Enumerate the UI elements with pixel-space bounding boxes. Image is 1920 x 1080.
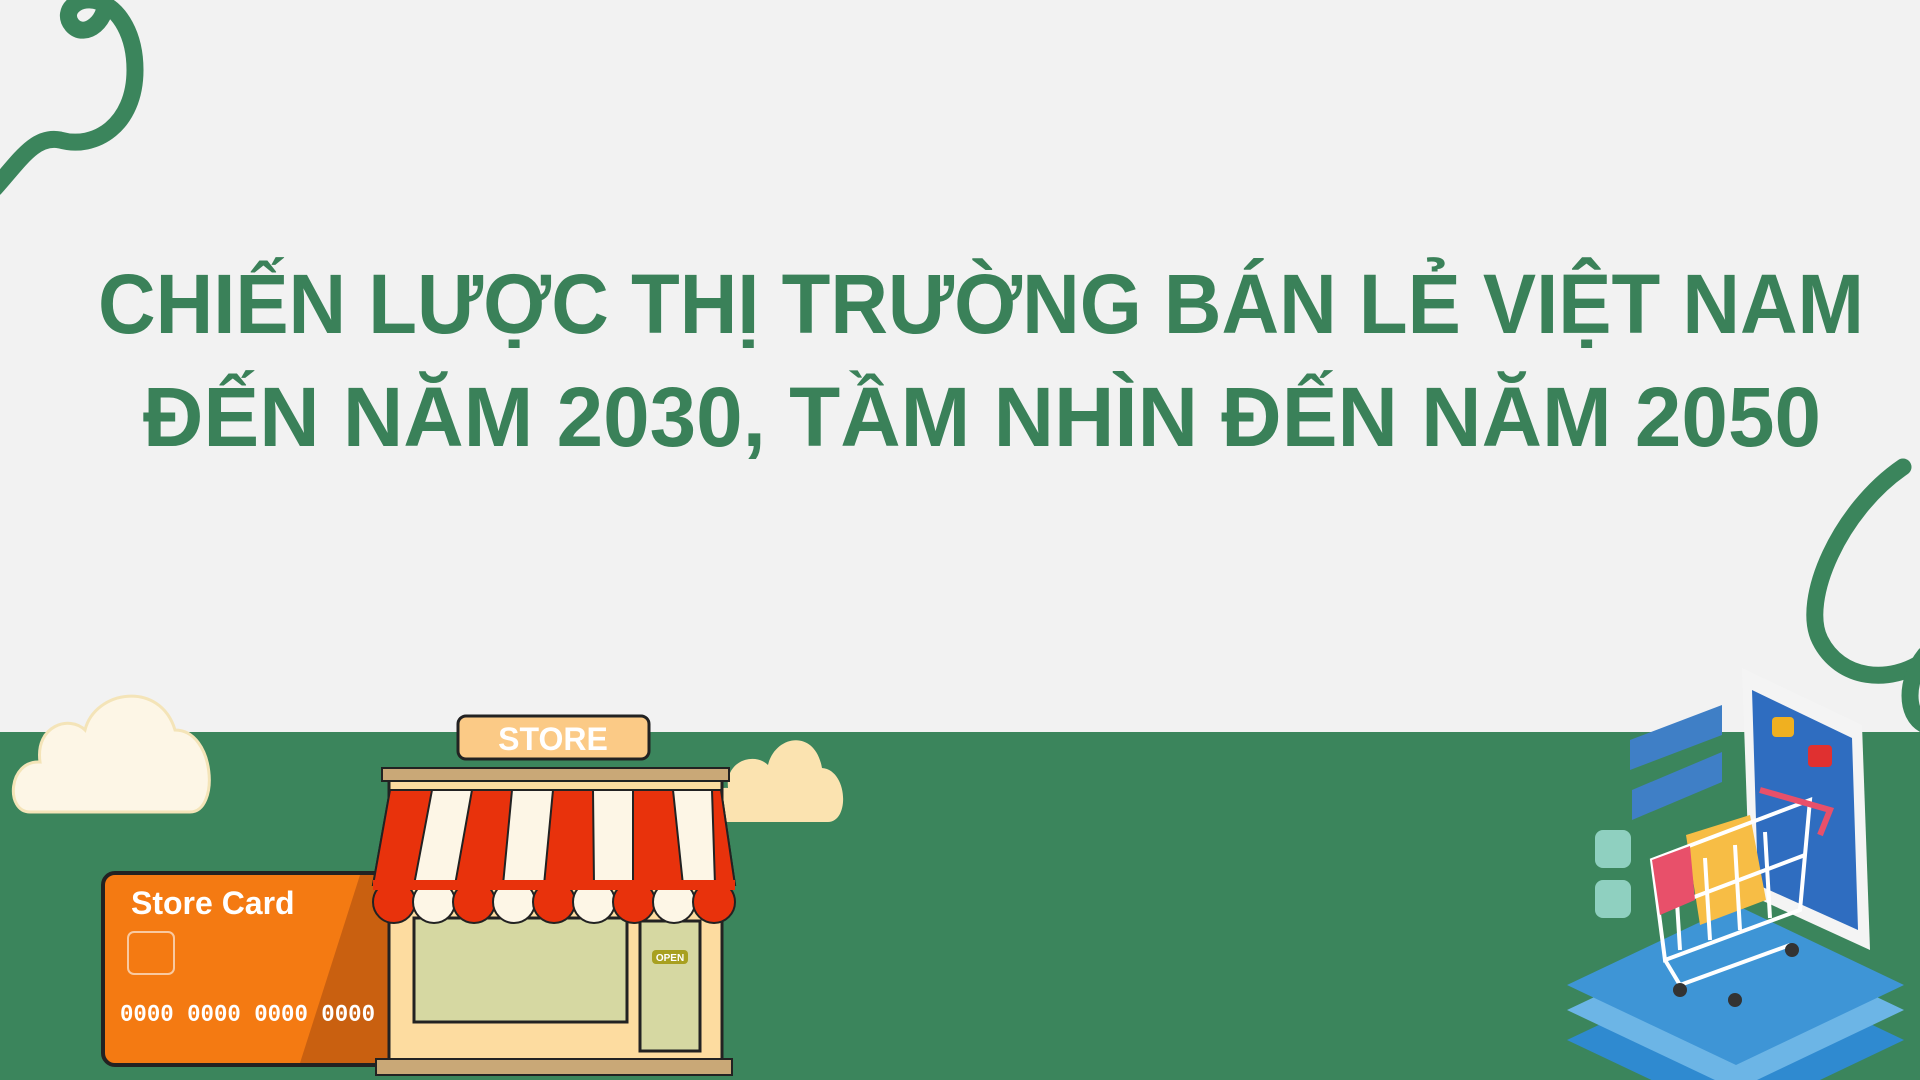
cart [1652,800,1810,985]
title: ĐẾN NĂM 2030, TẦM NHÌN ĐẾN NĂM 2050 [143,370,1821,464]
platform layers [1567,960,1904,1080]
awning [373,790,735,923]
door [640,921,700,1051]
door: OPEN [656,953,684,964]
cloud left [13,696,209,812]
cloud right [708,740,843,822]
store card: 0000 0000 0000 0000 [120,1002,375,1029]
small icons [1595,830,1631,868]
green band [0,732,1920,1080]
window [414,918,627,1022]
phone [1742,668,1870,950]
store card [103,873,393,1065]
store card: Store Card [131,885,295,921]
title [98,257,1864,464]
chat bubbles [1630,705,1722,770]
decoration: right swirl [1815,467,1920,725]
store building [373,716,735,1075]
bag [1686,815,1766,925]
title: CHIẾN LƯỢC THỊ TRƯỜNG BÁN LẺ VIỆT NAM [98,257,1864,351]
store sign: STORE [498,721,608,757]
decoration: top-left swirl [0,0,135,188]
store sign [458,716,649,759]
chip [128,932,174,974]
online shopping illustration [1567,668,1904,1080]
